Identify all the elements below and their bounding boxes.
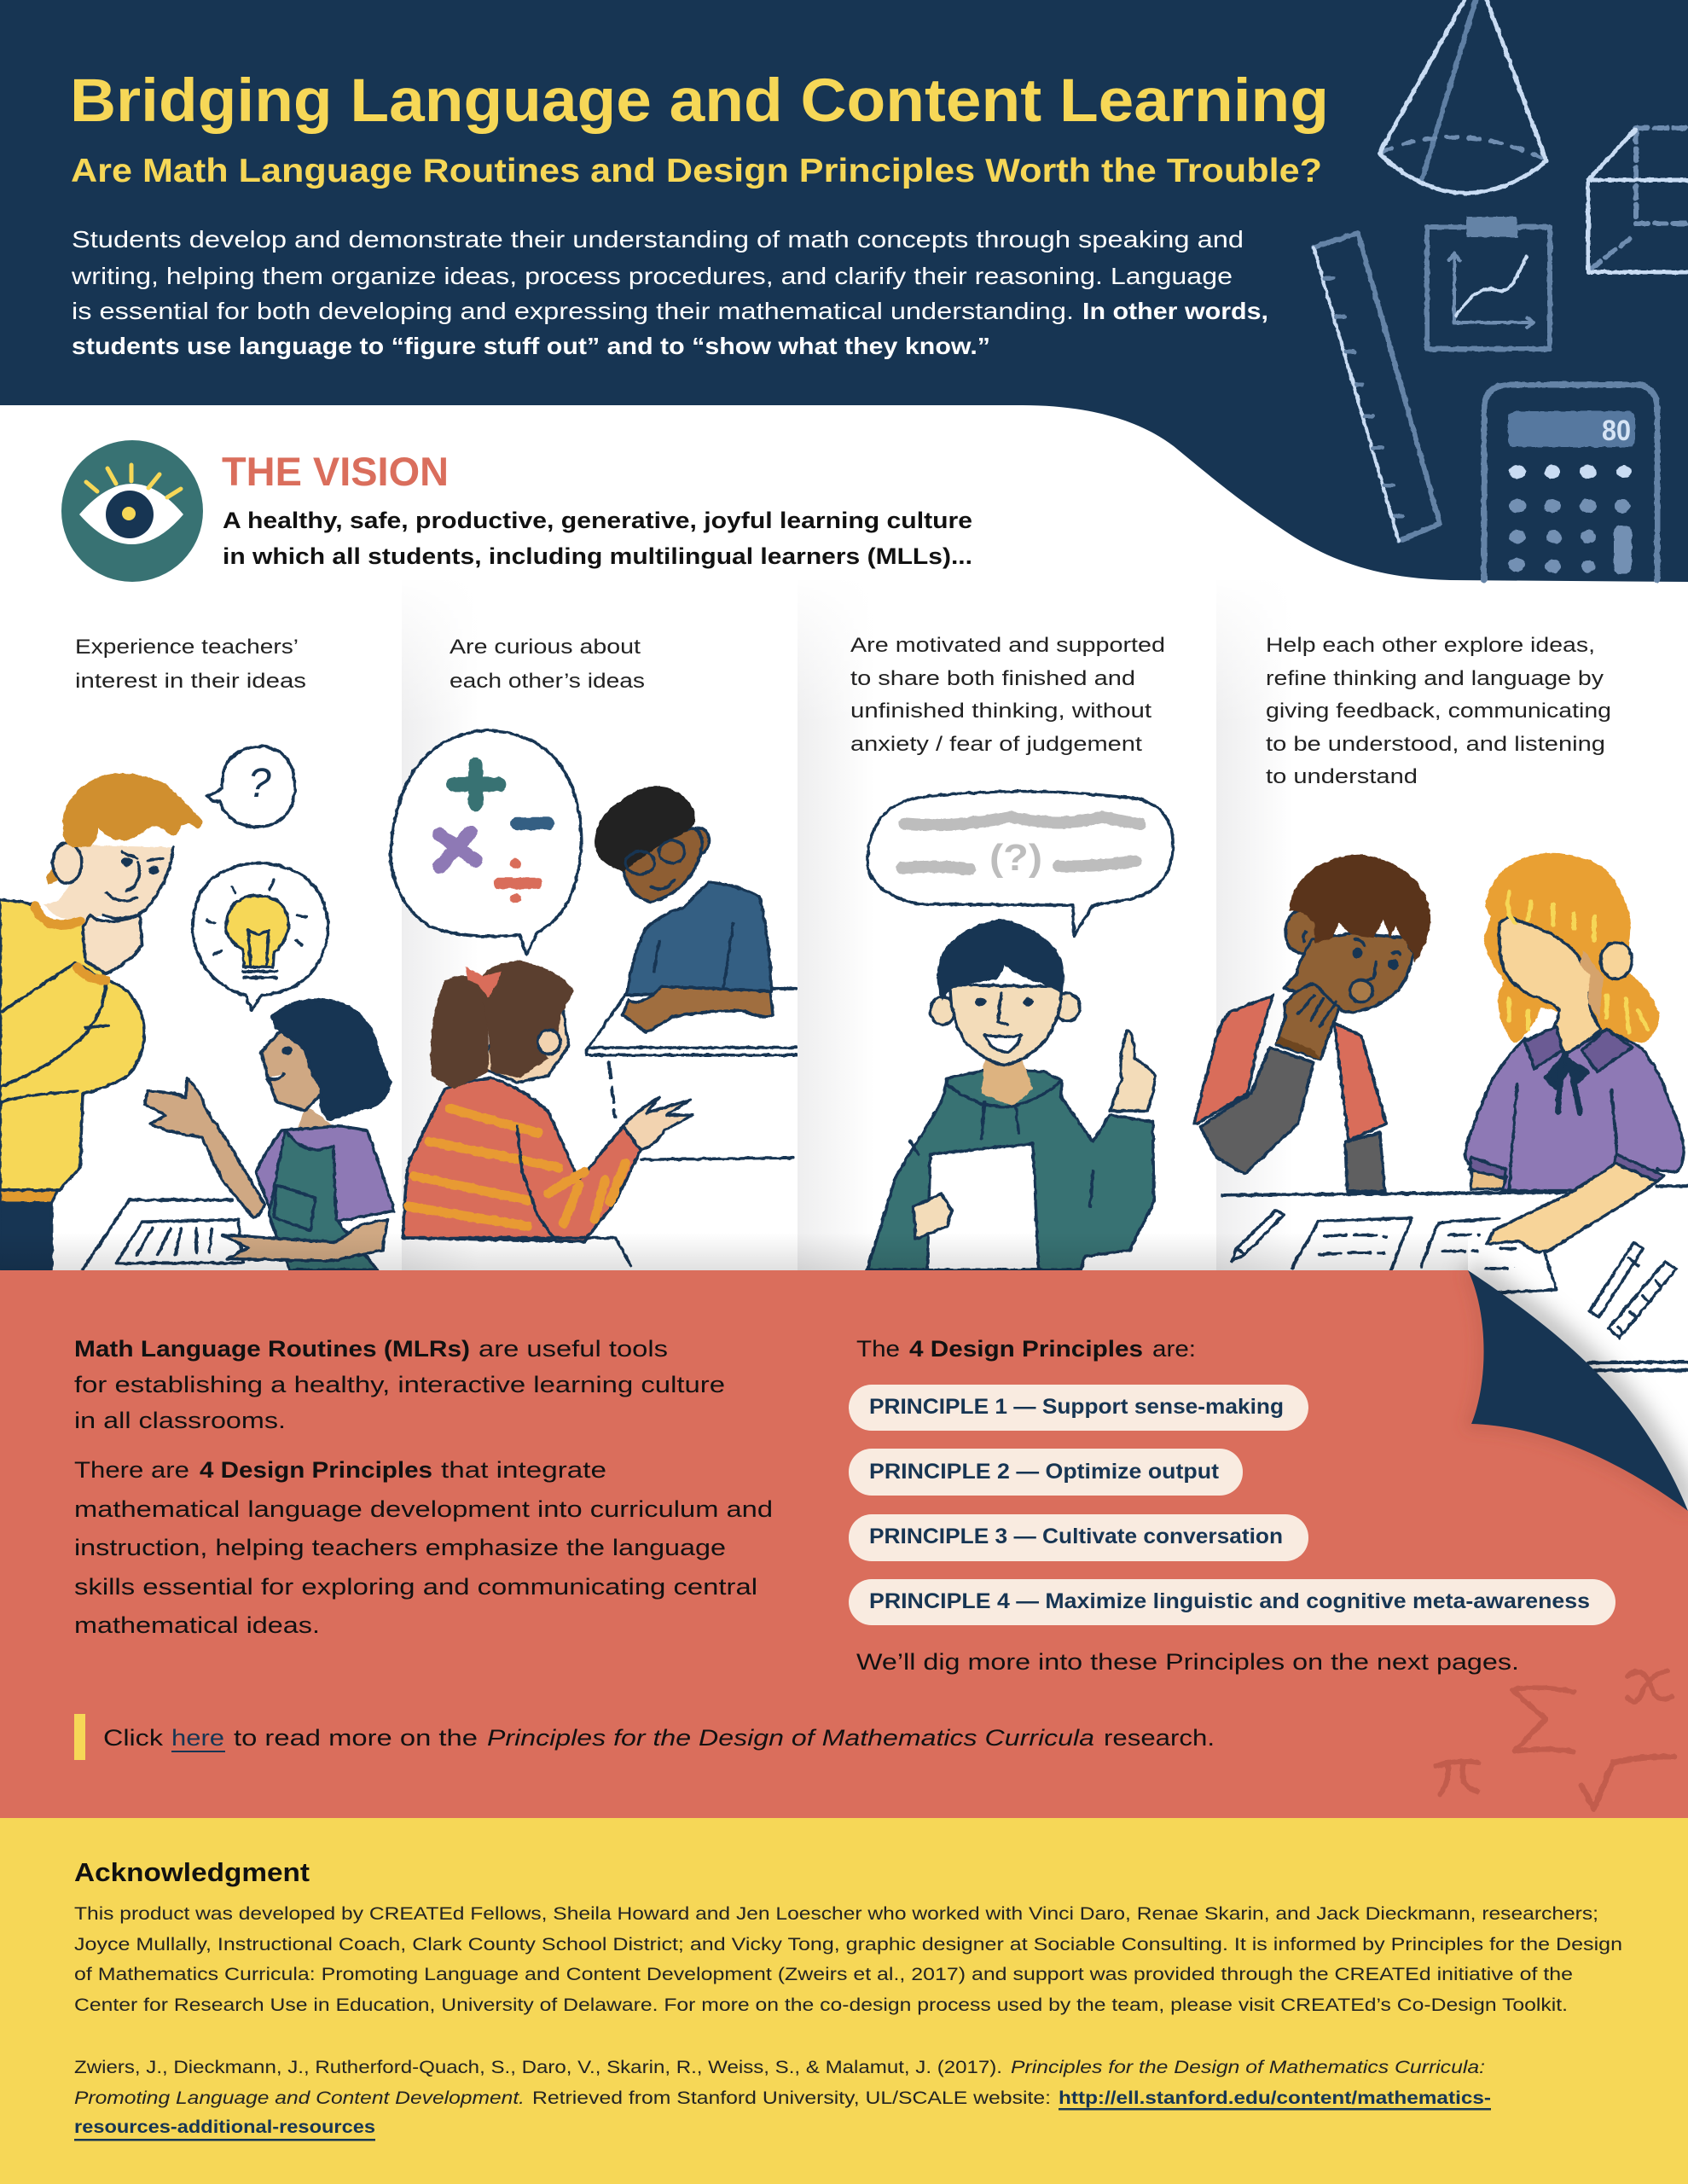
panel: column 1 text: interest in their ideas <box>75 670 306 693</box>
icon: calculator <box>1484 385 1657 580</box>
page curl shadow <box>1468 1270 1688 1511</box>
principle 3 pill: PRINCIPLE 3 — Cultivate conversation <box>869 1525 1283 1548</box>
principles intro: The <box>856 1336 900 1362</box>
panel: column 3 text: Are motivated and supported <box>850 634 1165 657</box>
icon: clipboard chart <box>1427 218 1550 349</box>
principles intro <box>856 1336 1196 1362</box>
principles intro: are: <box>1152 1336 1196 1362</box>
icon: question mark in bubble: ? <box>248 761 271 806</box>
citation: resources-additional-resources <box>74 2117 375 2137</box>
citation <box>74 2057 1491 2141</box>
subtitle: Are Math Language Routines and Design Principles Worth the Trouble? <box>71 153 1322 189</box>
panel: column 4 text: to understand <box>1266 765 1418 788</box>
citation: Principles for the Design of Mathematics Curricula: <box>1011 2057 1485 2077</box>
shadow above red panel <box>0 1233 1468 1270</box>
intro paragraph: writing, helping them organize ideas, process procedures, and clarify their reasoning. Language <box>71 263 1233 289</box>
principle 3 pill <box>849 1514 1308 1561</box>
panel: left column text: are useful tools <box>479 1336 668 1362</box>
panel: red background <box>0 1270 1688 1818</box>
illustration: students sharing ideas with math symbols <box>391 730 796 1265</box>
illustration: students giving feedback at a table <box>1194 853 1688 1294</box>
citation: Promoting Language and Content Development. <box>74 2088 525 2108</box>
citation: Zwiers, J., Dieckmann, J., Rutherford-Quach, S., Daro, V., Skarin, R., Weiss, S., & Malamut, J. (2017). <box>74 2057 1002 2077</box>
intro paragraph: Students develop and demonstrate their understanding of math concepts through speaking and <box>72 226 1244 253</box>
panel: left column text: mathematical ideas. <box>74 1612 320 1638</box>
principle 2 pill: PRINCIPLE 2 — Optimize output <box>869 1460 1220 1484</box>
citation: Retrieved from Stanford University, UL/SCALE website: <box>532 2088 1051 2108</box>
vision statement: in which all students, including multilingual learners (MLLs)... <box>223 543 972 569</box>
panel: column 4 text <box>1266 634 1611 788</box>
intro paragraph: students use language to “figure stuff out” and to “show what they know.” <box>72 333 990 359</box>
page curl <box>1450 1270 1688 1553</box>
illustration: teacher and student with idea bubbles <box>0 746 394 1269</box>
illustration: math tools chalk drawings <box>1314 0 1688 580</box>
vision statement: A healthy, safe, productive, generative, joyful learning culture <box>223 508 972 533</box>
panel: column 4 text: giving feedback, communicating <box>1266 700 1611 723</box>
illustration: student sharing unfinished thinking <box>867 792 1173 1269</box>
icon: ruler <box>1314 233 1440 541</box>
principles intro: 4 Design Principles <box>909 1336 1143 1362</box>
panel: column 1 text <box>75 636 306 693</box>
callout: read more link: to read more on the <box>234 1725 478 1751</box>
principle 2 pill <box>849 1449 1243 1496</box>
column shading panels <box>392 572 1331 1271</box>
callout: read more link: Principles for the Design of Mathematics Curricula <box>487 1725 1094 1751</box>
acknowledgment paragraph: Center for Research Use in Education, University of Delaware. For more on the co-design process used by the team, please visit CREATEd’s Co-Design Toolkit. <box>74 1995 1568 2015</box>
acknowledgment paragraph <box>74 1903 1622 2015</box>
panel: column 3 text: to share both finished and <box>850 667 1135 690</box>
calculator display value: 80 <box>1602 415 1631 447</box>
panel: column 4 text: to be understood, and listening <box>1266 733 1605 756</box>
panel: left column text <box>74 1336 773 1638</box>
icon: vision eye <box>61 440 203 582</box>
panel: left column text: skills essential for exploring and communicating central <box>74 1574 757 1600</box>
panel: column 3 text: unfinished thinking, without <box>850 700 1151 723</box>
callout: read more link <box>74 1714 1215 1760</box>
intro paragraph <box>71 226 1268 359</box>
principle 1 pill <box>849 1385 1308 1431</box>
citation: http://ell.stanford.edu/content/mathematics- <box>1059 2088 1491 2108</box>
heading: acknowledgment: Acknowledgment <box>74 1857 310 1887</box>
callout: read more link: Click <box>103 1725 164 1751</box>
icon: cube <box>1588 128 1688 272</box>
panel: column 4 text: Help each other explore ideas, <box>1266 634 1595 657</box>
icon: question in speech bubble: (?) <box>989 837 1042 879</box>
panel: left column text: There are <box>74 1457 189 1483</box>
illustration: pens and table edge <box>1588 1243 1688 1370</box>
header band <box>0 0 1688 582</box>
panel: left column text: Math Language Routines (MLRs) <box>74 1336 470 1362</box>
principles closing note: We’ll dig more into these Principles on the next pages. <box>856 1649 1519 1675</box>
principle 1 pill: PRINCIPLE 1 — Support sense-making <box>869 1395 1284 1419</box>
vision statement <box>223 508 972 569</box>
panel: acknowledgment background <box>0 1818 1688 2184</box>
panel: column 4 text: refine thinking and language by <box>1266 667 1604 690</box>
callout: read more link: research. <box>1104 1725 1215 1751</box>
panel: column 1 text: Experience teachers’ <box>75 636 299 659</box>
callout: read more link: here <box>171 1725 224 1751</box>
panel: left column text: mathematical language development into curriculum and <box>74 1496 773 1522</box>
principle 4 pill: PRINCIPLE 4 — Maximize linguistic and cognitive meta-awareness <box>869 1589 1590 1613</box>
panel: left column text: for establishing a healthy, interactive learning culture <box>74 1372 725 1397</box>
intro paragraph: In other words, <box>1082 298 1268 324</box>
intro paragraph: is essential for both developing and expressing their mathematical understanding. <box>72 298 1074 324</box>
panel: left column text: that integrate <box>441 1457 606 1483</box>
panel: column 3 text: anxiety / fear of judgement <box>850 733 1142 756</box>
panel: left column text: instruction, helping teachers emphasize the language <box>74 1535 726 1560</box>
title: Bridging Language and Content Learning <box>70 67 1329 135</box>
icon: cone <box>1379 0 1546 193</box>
acknowledgment paragraph: of Mathematics Curricula: Promoting Language and Content Development (Zweirs et al., 2017) and support was provided through the CREATEd initiative of the <box>74 1964 1573 1984</box>
icon: faint math symbols <box>1436 1670 1674 1809</box>
panel: column 2 text: each other’s ideas <box>450 670 645 693</box>
panel: column 3 text <box>850 634 1165 756</box>
acknowledgment paragraph: This product was developed by CREATEd Fellows, Sheila Howard and Jen Loescher who worked with Vinci Daro, Renae Skarin, and Jack Dieckmann, researchers; <box>74 1903 1598 1924</box>
acknowledgment paragraph: Joyce Mullally, Instructional Coach, Clark County School District; and Vicky Tong, graphic designer at Sociable Consulting. It is informed by Principles for the Design <box>74 1934 1622 1955</box>
principle 4 pill <box>849 1579 1615 1625</box>
panel: column 2 text <box>450 636 645 693</box>
panel: column 2 text: Are curious about <box>450 636 641 659</box>
panel: left column text: 4 Design Principles <box>200 1457 432 1483</box>
heading: the vision: THE VISION <box>222 449 449 494</box>
panel: left column text: in all classrooms. <box>74 1408 286 1433</box>
